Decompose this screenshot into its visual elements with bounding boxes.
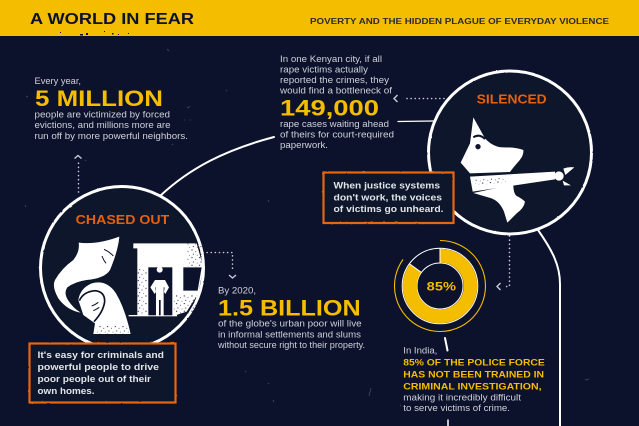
panel: silenced bbox=[428, 71, 592, 234]
text: 1.5 billion urban poor: of the globe's urban poor will live bbox=[218, 319, 362, 329]
text: India police: to serve victims of crime. bbox=[403, 403, 510, 413]
panel: chased out bbox=[40, 186, 204, 350]
text: 5 million evictions bbox=[34, 76, 188, 141]
callout: silenced bbox=[324, 172, 454, 223]
text: India police: CRIMINAL INVESTIGATION, bbox=[403, 382, 542, 393]
callout: silenced: of victims go unheard. bbox=[334, 204, 444, 215]
callout: chased out: powerful people to drive bbox=[38, 362, 159, 373]
subtitle: POVERTY AND THE HIDDEN PLAGUE OF EVERYDAY VIOLENCE bbox=[310, 16, 609, 26]
callout: chased out: It's easy for criminals and bbox=[38, 350, 164, 361]
text: 5 million evictions: evictions, and millions more are bbox=[34, 120, 170, 130]
text: 5 million evictions: people are victimized by forced bbox=[34, 110, 170, 120]
circle outline bbox=[428, 71, 592, 234]
outer progress arc bbox=[394, 240, 485, 332]
heading: chased out: CHASED OUT bbox=[76, 213, 170, 227]
heading: silenced: SILENCED bbox=[477, 92, 547, 106]
text: India police: making it incredibly difficult bbox=[403, 393, 522, 403]
connector lines bbox=[160, 121, 560, 426]
text: India police: HAS NOT BEEN TRAINED IN bbox=[403, 370, 544, 381]
text: 5 million evictions: run off by more powerful neighbors. bbox=[34, 131, 188, 141]
callout: silenced: When justice systems bbox=[334, 180, 440, 192]
text: Kenya bottleneck: rape cases waiting ahead bbox=[280, 119, 389, 129]
header band bbox=[0, 0, 639, 36]
callout: silenced: don't work, the voices bbox=[334, 192, 442, 204]
text: Kenya bottleneck: paperwork. bbox=[280, 140, 328, 150]
text: Kenya bottleneck: reported the crimes, they bbox=[280, 75, 390, 85]
text: Kenya bottleneck: In one Kenyan city, if all bbox=[280, 54, 382, 64]
stat: 149,000: 149,000 bbox=[280, 96, 379, 120]
arrow: chased out up to 5 million bbox=[74, 156, 82, 192]
text: Kenya bottleneck: rape victims actually bbox=[280, 64, 369, 74]
text: Kenya bottleneck: of theirs for court-required bbox=[280, 130, 394, 140]
stat: 1.5 billion: 1.5 BILLION bbox=[218, 295, 361, 320]
text: India police bbox=[403, 346, 545, 413]
text: Kenya bottleneck: would find a bottleneck of bbox=[279, 86, 393, 96]
text: 1.5 billion urban poor: in informal settlements and slums bbox=[218, 330, 362, 340]
icon: gagged face bbox=[461, 117, 574, 223]
icon: mother and child bbox=[54, 237, 132, 335]
text: India police: In India, bbox=[403, 346, 437, 356]
text: 1.5 billion urban poor: By 2020, bbox=[218, 286, 256, 296]
circle outline bbox=[40, 186, 204, 350]
donut value: 85% bbox=[427, 282, 456, 294]
title: A WORLD IN FEAR bbox=[30, 11, 194, 28]
arrow: house down to 1.5 billion bbox=[203, 252, 236, 278]
callout: chased out: own homes. bbox=[38, 386, 94, 397]
callout: chased out: poor people out of their bbox=[38, 374, 151, 385]
arrow: silenced down to donut bbox=[497, 236, 510, 290]
text: 1.5 billion urban poor bbox=[217, 286, 365, 350]
arrow: silenced to 149,000 bbox=[394, 95, 444, 102]
text: 5 million evictions: Every year, bbox=[34, 76, 81, 86]
text: 1.5 billion urban poor: without secure right to their property. bbox=[217, 340, 365, 350]
text: Kenya bottleneck bbox=[279, 54, 394, 150]
donut chart: 85% bbox=[394, 240, 485, 332]
highlight: police statistic: 85% OF THE POLICE FORCE bbox=[403, 358, 545, 369]
callout: chased out bbox=[30, 344, 176, 402]
icon: house with man in doorway bbox=[129, 243, 203, 316]
stat: 5 million: 5 MILLION bbox=[35, 86, 163, 111]
